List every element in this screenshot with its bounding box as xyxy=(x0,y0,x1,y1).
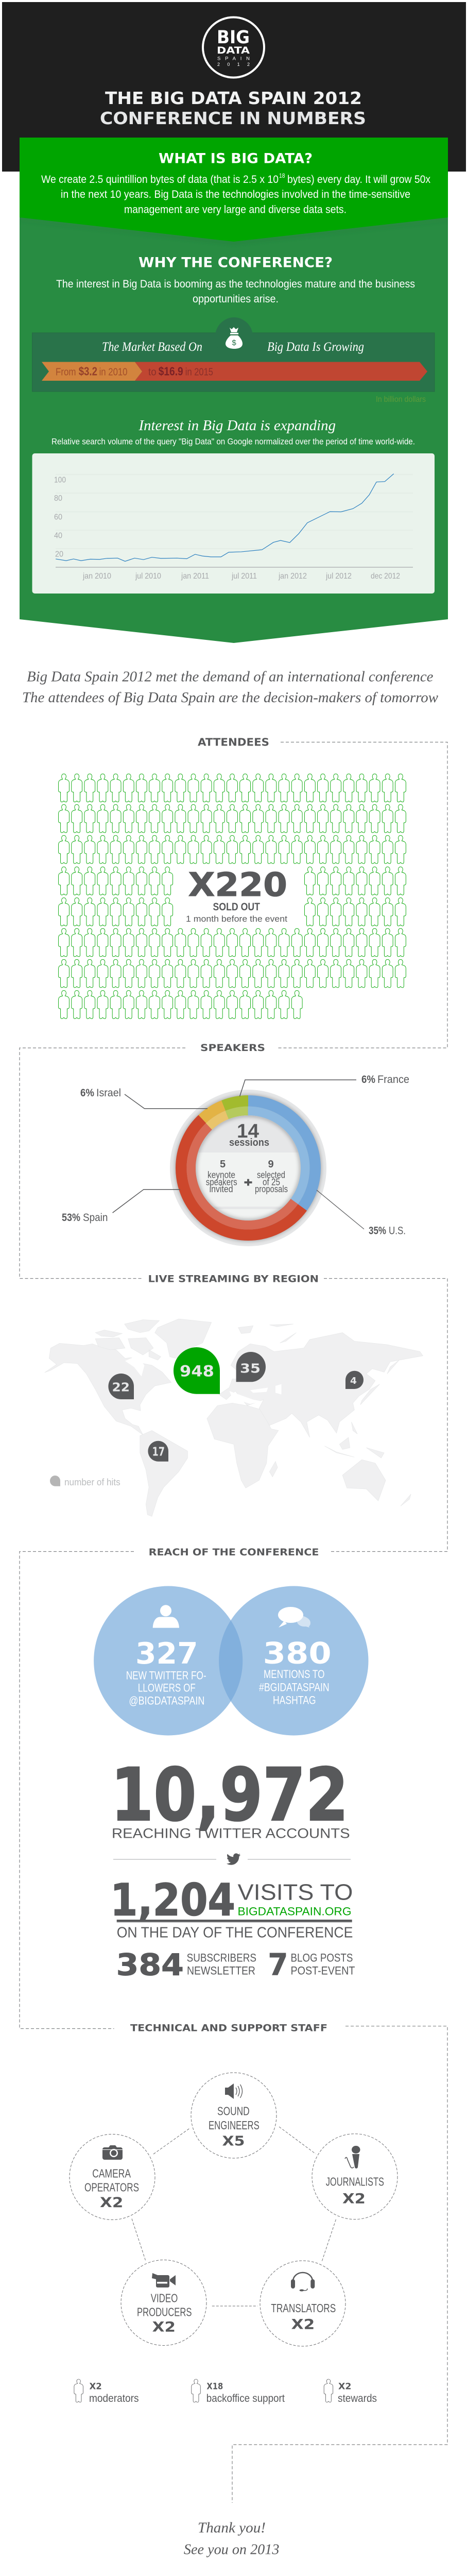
stat: new followers xyxy=(126,1637,206,1707)
intro statement: Big Data Spain 2012 met the demand of an international conference xyxy=(27,669,434,685)
marker: europe 948 xyxy=(174,1347,220,1394)
staff: stewards xyxy=(324,2379,377,2404)
sessions count: keynote xyxy=(207,1170,235,1180)
market growth panel: Big Data Is Growing xyxy=(267,340,364,354)
marker: east europe 35: 35 xyxy=(240,1361,261,1376)
staff: stewards: stewards xyxy=(338,2393,377,2404)
marker: europe 948: 948 xyxy=(180,1363,214,1380)
callout: x220 sold out xyxy=(186,866,287,924)
sessions count: selected xyxy=(257,1170,285,1180)
title xyxy=(100,88,366,128)
heading: what is big data: WHAT IS BIG DATA? xyxy=(159,150,313,166)
staff: moderators: X2 xyxy=(90,2382,102,2392)
label: france: 6% xyxy=(361,1074,375,1086)
icon: chat bubbles xyxy=(278,1607,310,1628)
stat: new followers: 327 xyxy=(135,1637,198,1671)
staff: moderators: moderators xyxy=(89,2393,139,2404)
text: what is big data: in the next 10 years. Big Data is the technologies involved in the time-sensitive xyxy=(61,189,410,200)
stat: mentions: HASHTAG xyxy=(273,1693,316,1706)
intro statement: The attendees of Big Data Spain are the decision-makers of tomorrow xyxy=(22,689,439,706)
stat: website visits: ON THE DAY OF THE CONFERENCE xyxy=(117,1925,353,1941)
label: spain: Spain xyxy=(83,1212,108,1224)
marker: north america 22: 22 xyxy=(112,1381,130,1395)
callout: x220 sold out: SOLD OUT xyxy=(213,901,260,913)
stat: website visits: 1,204 xyxy=(110,1875,235,1926)
icon: person xyxy=(153,1605,179,1628)
line chart: jan 2012 xyxy=(278,572,307,581)
label: spain: 53% xyxy=(62,1212,80,1224)
node: camera operators: CAMERA xyxy=(92,2167,131,2180)
logo: SPAIN xyxy=(217,56,250,62)
market growth panel: The Market Based On xyxy=(102,340,202,354)
text: why the conference xyxy=(56,278,415,305)
stat: blog posts: BLOG POSTS xyxy=(290,1951,353,1964)
node: video producers: VIDEO xyxy=(151,2292,178,2305)
stat: mentions: #BGIDATASPAIN xyxy=(259,1681,330,1693)
sessions count: speakers xyxy=(206,1177,237,1188)
icon: money bag xyxy=(226,327,243,349)
stat: mentions xyxy=(259,1636,332,1706)
arrow bar: 2010 to 2015: From xyxy=(56,367,76,378)
closing message: See you on 2013 xyxy=(184,2541,279,2557)
node: sound engineers: ENGINEERS xyxy=(209,2119,260,2132)
marker: south america 17: 17 xyxy=(152,1446,165,1459)
attendee pictogram grid xyxy=(59,774,406,1019)
heading: interest in big data: Interest in Big Data is expanding xyxy=(139,417,336,434)
icon: video camera xyxy=(152,2273,176,2287)
stat: newsletter subscribers: SUBSCRIBERS xyxy=(187,1951,256,1964)
title: CONFERENCE IN NUMBERS xyxy=(100,108,366,128)
stat: new followers: @BIGDATASPAIN xyxy=(129,1694,204,1707)
text: what is big data: We create 2.5 quintillion bytes of data (that is 2.5 x 10 xyxy=(41,174,279,185)
text: why the conference: The interest in Big Data is booming as the technologies mature and the business xyxy=(56,278,415,290)
heading: live streaming: LIVE STREAMING BY REGION xyxy=(148,1273,319,1284)
icon: headset xyxy=(291,2273,315,2292)
sessions count xyxy=(206,1121,288,1194)
line chart: dec 2012 xyxy=(371,572,400,581)
heading: reach: REACH OF THE CONFERENCE xyxy=(149,1547,319,1558)
line chart: jul 2010 xyxy=(135,572,161,581)
label: us xyxy=(317,1190,406,1237)
staff: backoffice support: X18 xyxy=(206,2382,223,2392)
section connectors: dashed path xyxy=(20,742,447,2503)
icon: microphone xyxy=(345,2146,360,2168)
staff network connectors xyxy=(132,2127,336,2306)
title: THE BIG DATA SPAIN 2012 xyxy=(105,88,362,108)
node: camera operators xyxy=(70,2134,155,2219)
panel: why the conference xyxy=(20,216,448,643)
world map xyxy=(45,1319,423,1516)
stat: mentions: 380 xyxy=(263,1636,332,1670)
heading: attendees: ATTENDEES xyxy=(198,736,269,749)
line chart: jan 2011 xyxy=(181,572,209,581)
text: what is big data: 18 xyxy=(279,172,285,179)
marker: south america 17 xyxy=(148,1441,168,1462)
staff: moderators xyxy=(74,2379,139,2404)
donut chart: speakers by country xyxy=(170,1090,326,1246)
marker: asia 4: 4 xyxy=(350,1376,357,1386)
node: sound engineers xyxy=(191,2073,276,2158)
venn diagram: followers and mentions xyxy=(94,1586,369,1735)
panel: what is big data xyxy=(20,138,448,244)
arrow bar: 2010 to 2015: in 2015 xyxy=(185,367,213,378)
label: israel: 6% xyxy=(80,1087,94,1099)
donut segments xyxy=(181,1101,315,1235)
line chart: 60 xyxy=(54,513,62,521)
node: translators: TRANSLATORS xyxy=(271,2301,336,2315)
heading: technical staff: TECHNICAL AND SUPPORT STAFF xyxy=(130,2023,327,2034)
node: journalists xyxy=(312,2134,397,2219)
stat: newsletter subscribers xyxy=(116,1947,256,1982)
stat: twitter reach: REACHING TWITTER ACCOUNTS xyxy=(112,1826,350,1841)
arrow bar: 2010 to 2015 xyxy=(42,362,427,381)
stat: newsletter subscribers: 384 xyxy=(116,1947,184,1982)
line chart: jul 2011 xyxy=(231,572,257,581)
stat: website visits: VISITS TO xyxy=(238,1879,353,1905)
staff: backoffice support xyxy=(192,2379,285,2404)
text: why the conference: opportunities arise. xyxy=(193,293,279,305)
staff: backoffice support: backoffice support xyxy=(206,2393,285,2404)
arrow bar: 2010 to 2015: to xyxy=(148,367,157,378)
node: translators xyxy=(260,2261,345,2346)
node: sound engineers: X5 xyxy=(222,2133,245,2149)
stat: mentions: MENTIONS TO xyxy=(264,1668,324,1681)
marker: asia 4 xyxy=(345,1371,364,1389)
label: us: U.S. xyxy=(389,1225,406,1237)
line chart: 40 xyxy=(54,532,62,540)
line chart: 80 xyxy=(54,494,62,503)
legend: number of hits: number of hits xyxy=(64,1477,120,1487)
stat: newsletter subscribers: NEWSLETTER xyxy=(187,1964,255,1977)
icon: camera xyxy=(102,2145,123,2160)
logo: BIG xyxy=(217,27,250,48)
logo: 2012 xyxy=(217,62,250,67)
closing message: Thank you! xyxy=(198,2520,266,2536)
stat: new followers: LLOWERS OF xyxy=(138,1682,196,1694)
label: spain xyxy=(62,1190,180,1224)
closing message xyxy=(184,2520,279,2557)
label: france xyxy=(240,1074,409,1096)
callout: x220 sold out: X220 xyxy=(188,866,287,904)
label: israel: Israel xyxy=(96,1087,121,1099)
staff: stewards: X2 xyxy=(338,2382,351,2392)
stat: website visits: BIGDATASPAIN.ORG xyxy=(238,1905,351,1918)
donut centre panel xyxy=(195,1115,301,1221)
sessions count: of 25 xyxy=(263,1177,280,1188)
subheading: relative search volume: Relative search volume of the query "Big Data" on Google normalized over the period of time world-wide. xyxy=(51,436,415,446)
arrow bar: 2010 to 2015: $3.2 xyxy=(79,365,97,378)
icon: money bag: $ xyxy=(232,338,236,347)
node: translators: X2 xyxy=(291,2316,315,2332)
stat: new followers: NEW TWITTER FO- xyxy=(126,1669,206,1682)
market growth panel xyxy=(32,317,435,392)
node: video producers: PRODUCERS xyxy=(137,2305,192,2318)
line chart xyxy=(32,453,435,594)
arrow bar: 2010 to 2015: $16.9 xyxy=(159,365,183,378)
heading: why the conference: WHY THE CONFERENCE? xyxy=(139,255,333,270)
legend: number of hits xyxy=(50,1476,120,1487)
divider with twitter bird xyxy=(113,1853,351,1865)
sessions count: sessions xyxy=(229,1137,269,1148)
node: camera operators: OPERATORS xyxy=(84,2180,139,2194)
arrow bar: 2010 to 2015: in 2010 xyxy=(99,367,128,378)
label: us: 35% xyxy=(369,1225,386,1237)
line chart: jul 2012 xyxy=(325,572,352,581)
node: journalists: JOURNALISTS xyxy=(326,2175,384,2188)
marker: north america 22 xyxy=(108,1374,134,1399)
text: what is big data xyxy=(41,172,430,215)
intro statement xyxy=(22,669,439,706)
sessions count: 14 xyxy=(237,1121,259,1142)
label: france: France xyxy=(377,1074,409,1086)
label: israel xyxy=(80,1087,207,1109)
logo: DATA xyxy=(217,45,250,56)
node: camera operators: X2 xyxy=(100,2195,123,2211)
line chart: jan 2010 xyxy=(82,572,111,581)
sessions count: invited xyxy=(210,1184,233,1194)
line chart: 20 xyxy=(55,550,63,558)
text: what is big data: management are very large and diverse data sets. xyxy=(124,204,347,215)
stat: blog posts: 7 xyxy=(268,1947,288,1982)
stat: twitter reach: 10,972 xyxy=(111,1753,349,1838)
heading: speakers: SPEAKERS xyxy=(200,1042,265,1054)
node: video producers: X2 xyxy=(152,2319,176,2335)
marker: east europe 35 xyxy=(236,1352,266,1382)
stat: website visits xyxy=(110,1875,353,1941)
line chart: 100 xyxy=(54,476,66,484)
sessions count: 5 xyxy=(220,1159,226,1170)
node: sound engineers: SOUND xyxy=(217,2104,250,2117)
node: video producers xyxy=(121,2260,206,2345)
logo xyxy=(203,18,264,77)
text: what is big data: bytes) every day. It will grow 50x xyxy=(287,174,430,185)
icon: speaker xyxy=(225,2083,242,2099)
callout: x220 sold out: 1 month before the event xyxy=(186,914,287,924)
note: in billion dollars: In billion dollars xyxy=(376,395,426,404)
node: journalists: X2 xyxy=(342,2191,366,2207)
stat: blog posts xyxy=(268,1947,355,1982)
sessions count: 9 xyxy=(268,1159,274,1170)
sessions count: proposals xyxy=(255,1184,288,1194)
header banner xyxy=(2,2,466,172)
stat: blog posts: POST-EVENT xyxy=(290,1964,355,1977)
